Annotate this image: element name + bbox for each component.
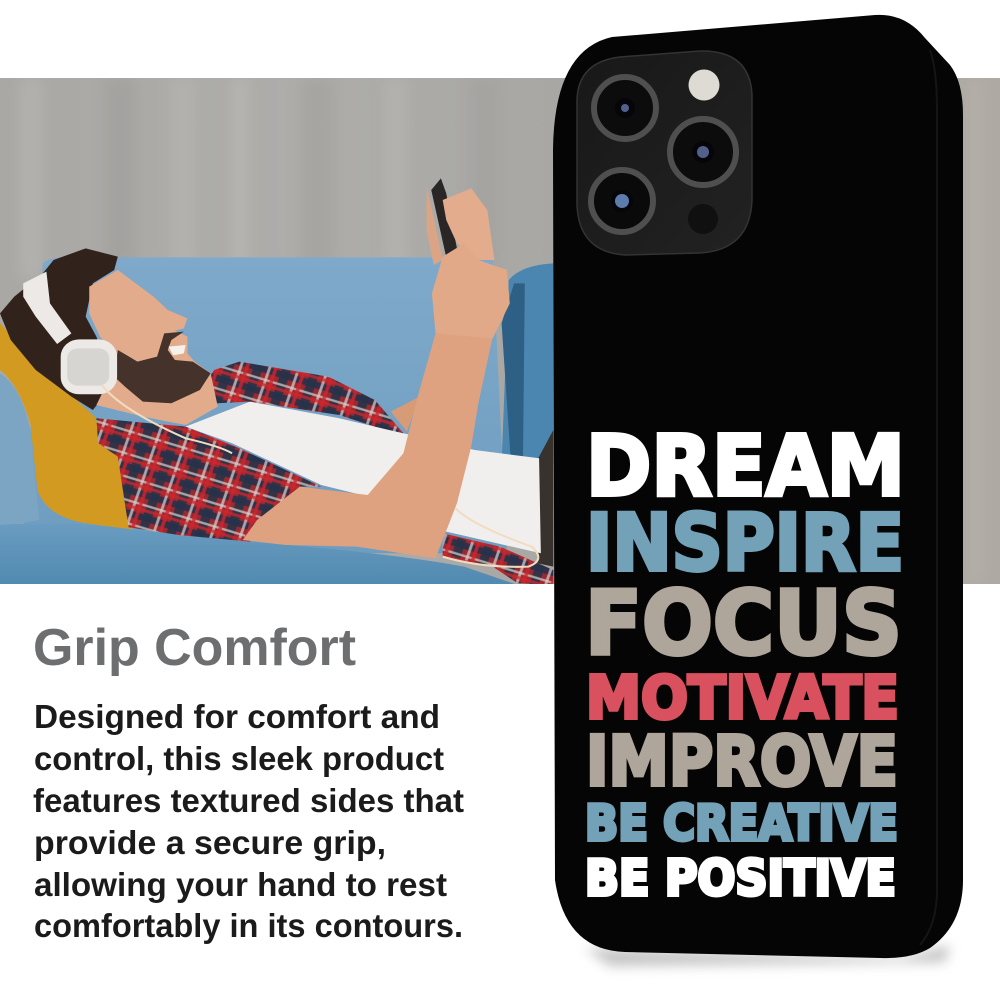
phone drop shadow (585, 945, 950, 966)
body text block: comfortably in its contours. (34, 907, 463, 944)
sofa right arm (502, 263, 553, 463)
body text block: Designed for comfort and (34, 698, 440, 735)
heading: Grip Comfort: Grip Comfort (33, 619, 356, 677)
far upper arm (391, 397, 419, 432)
body text block: provide a secure grip, (34, 824, 386, 861)
headphones (23, 272, 117, 394)
lens bottom left (591, 170, 653, 232)
plaid shirt collar (193, 362, 403, 433)
body text block: features textured sides that (33, 782, 464, 819)
yellow pillow (0, 323, 132, 530)
sofa and man, drawn in zoom-crop coordinates (0, 178, 553, 585)
slogan text: FOCUS (585, 572, 902, 675)
sofa seat (0, 523, 518, 585)
white t-shirt (186, 402, 541, 553)
hand (427, 187, 510, 338)
smartphone held (431, 178, 457, 257)
hair (0, 248, 118, 410)
lens right (670, 119, 736, 185)
phone case (553, 15, 963, 958)
flash (688, 70, 720, 100)
sofa left arm (0, 373, 39, 527)
case body (553, 15, 963, 958)
slogan text: BE CREATIVE (585, 795, 898, 852)
body text block (33, 698, 464, 944)
slogan text (585, 417, 905, 907)
smile (169, 345, 186, 355)
slogan text: IMPROVE (586, 722, 898, 802)
slogan text: MOTIVATE (586, 663, 899, 732)
face and neck (89, 270, 218, 425)
lifestyle photo: man on sofa (0, 78, 1000, 585)
case side highlight (920, 50, 937, 945)
jeans (537, 430, 553, 567)
body text block: control, this sleek product (34, 740, 444, 777)
concrete wall (0, 78, 1000, 584)
headphone cable (102, 385, 538, 567)
sofa back cushion (21, 257, 507, 553)
slogan text: BE POSITIVE (585, 850, 896, 907)
slogan text: DREAM (586, 417, 905, 515)
lens top left (594, 77, 656, 139)
body text block: allowing your hand to rest (34, 866, 447, 903)
plaid shirt hem (443, 533, 553, 585)
slogan text: INSPIRE (586, 499, 904, 589)
camera module (577, 51, 752, 255)
lidar (688, 204, 718, 234)
forearm (243, 333, 493, 558)
beard (114, 332, 211, 403)
plaid sleeve (96, 418, 321, 542)
